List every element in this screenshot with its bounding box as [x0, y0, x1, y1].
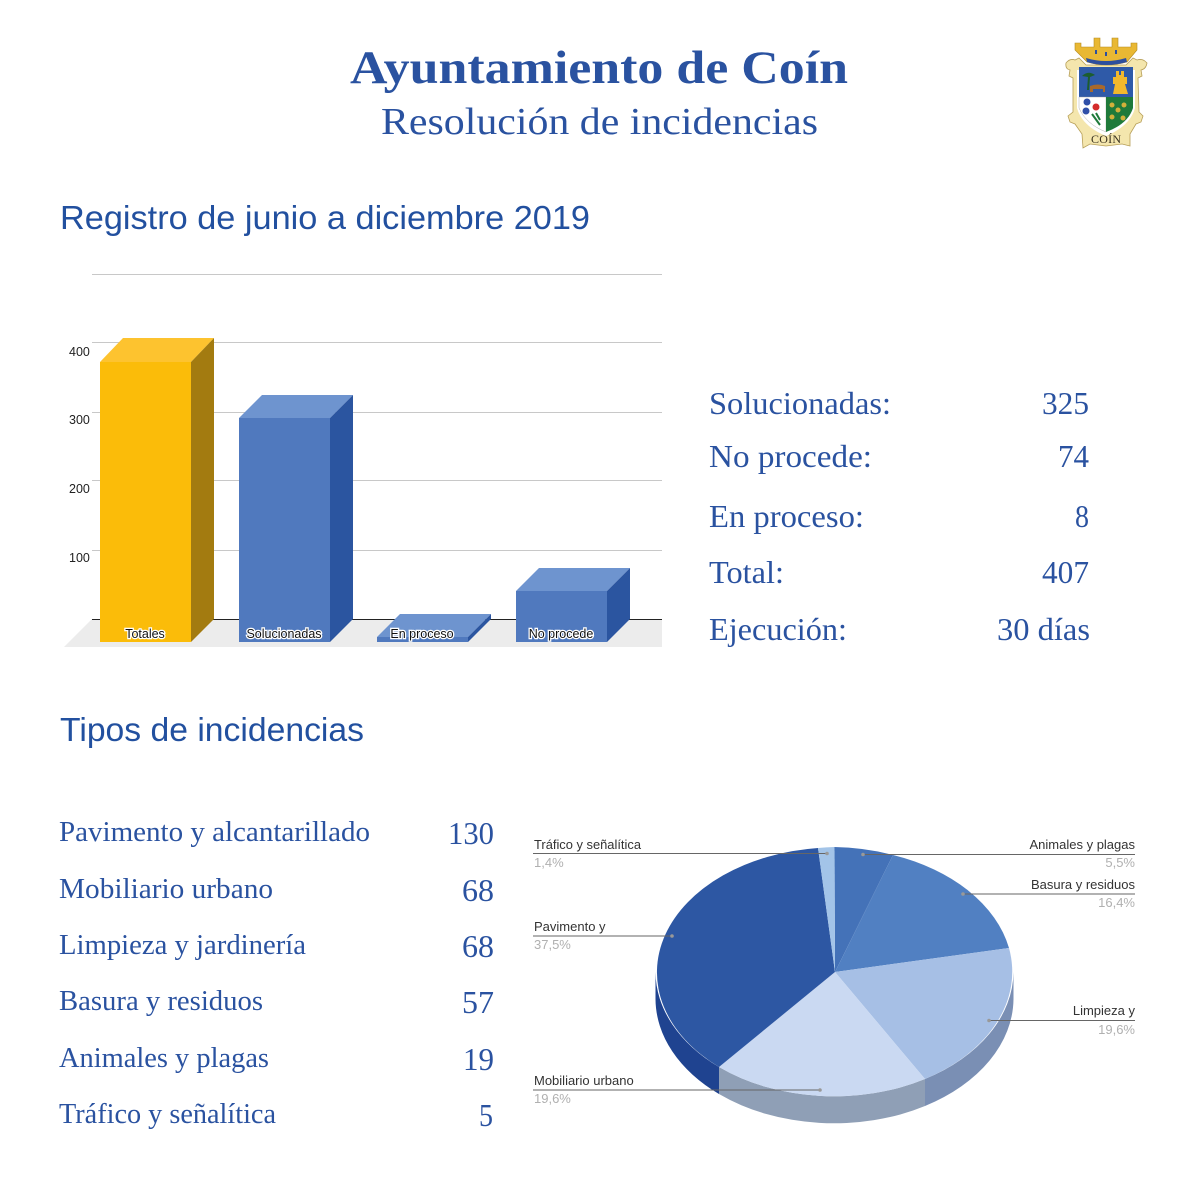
- incident types list: [59, 815, 494, 1133]
- summary list: No procede:: [709, 438, 872, 474]
- incident types list: 19: [463, 1041, 494, 1077]
- bar chart: 300: [69, 413, 90, 427]
- incident types list: 57: [462, 984, 494, 1020]
- pie label: Basura: [961, 877, 1135, 910]
- incident types list: Tráfico y señalítica: [59, 1098, 276, 1130]
- bar: Totales: Totales: [125, 627, 165, 641]
- incident types list: Pavimento y alcantarillado: [59, 816, 370, 848]
- subtitle: Resolución de incidencias: [381, 101, 818, 143]
- summary list: En proceso:: [709, 498, 864, 534]
- incident types list: Limpieza y jardinería: [59, 929, 306, 961]
- incident types list: Mobiliario urbano: [59, 873, 273, 905]
- title: Ayuntamiento de Coín: [350, 42, 848, 94]
- summary list: 74: [1058, 438, 1089, 474]
- summary list: Total:: [709, 554, 784, 590]
- incident types list: Animales y plagas: [59, 1042, 269, 1074]
- bar: Solucionadas: Solucionadas: [246, 627, 322, 641]
- summary list: Solucionadas:: [709, 385, 891, 421]
- summary list: Ejecución:: [709, 611, 847, 647]
- pie label: Mobiliario: Mobiliario urbano: [534, 1073, 634, 1088]
- summary list: 325: [1042, 385, 1089, 421]
- bar: No procede: No procede: [529, 627, 593, 641]
- bar chart: 100: [69, 551, 90, 565]
- icon: coat of arms of Coín: [1066, 38, 1147, 148]
- icon: coat of arms of Coín: COÍN: [1091, 132, 1121, 146]
- bar: Totales: [100, 338, 214, 642]
- pie label: Basura: 16,4%: [1098, 895, 1135, 910]
- pie label: Pavimento: [533, 919, 674, 952]
- pie label: Animales: [861, 837, 1135, 870]
- pie label: Animales: Animales y plagas: [1030, 837, 1135, 852]
- bar: En proceso: En proceso: [390, 627, 454, 641]
- pie label: Limpieza: 19,6%: [1098, 1022, 1135, 1037]
- pie label: Limpieza: [987, 1003, 1135, 1037]
- pie label: Limpieza: Limpieza y: [1073, 1003, 1135, 1018]
- pie label: Tráfico: Tráfico y señalítica: [534, 837, 642, 852]
- summary list: 407: [1042, 554, 1089, 590]
- pie label: Tráfico: [533, 837, 829, 870]
- bar chart: 400: [69, 345, 90, 359]
- pie label: Pavimento: 37,5%: [534, 937, 571, 952]
- pie label: Mobiliario: 19,6%: [534, 1091, 571, 1106]
- incident types list: 68: [462, 928, 494, 964]
- pie label: Basura: Basura y residuos: [1031, 877, 1135, 892]
- pie label: Animales: 5,5%: [1105, 855, 1135, 870]
- pie label: Mobiliario: [533, 1073, 822, 1106]
- bar chart: [64, 274, 662, 647]
- bar chart: 200: [69, 482, 90, 496]
- summary list: 30 días: [997, 611, 1090, 647]
- pie chart: [533, 837, 1135, 1123]
- bar: No procede: [516, 568, 630, 642]
- bar: En proceso: [377, 614, 491, 642]
- heading: registro: Registro de junio a diciembre 2019: [60, 199, 590, 236]
- incident types list: Basura y residuos: [59, 985, 263, 1017]
- heading: tipos: Tipos de incidencias: [60, 711, 364, 748]
- incident types list: 5: [479, 1097, 493, 1133]
- pie label: Pavimento: Pavimento y: [534, 919, 606, 934]
- incident types list: 68: [462, 872, 494, 908]
- summary list: 8: [1075, 498, 1089, 534]
- pie label: Tráfico: 1,4%: [534, 855, 564, 870]
- summary list: [709, 385, 1090, 647]
- incident types list: 130: [448, 815, 494, 851]
- bar: Solucionadas: [239, 395, 353, 642]
